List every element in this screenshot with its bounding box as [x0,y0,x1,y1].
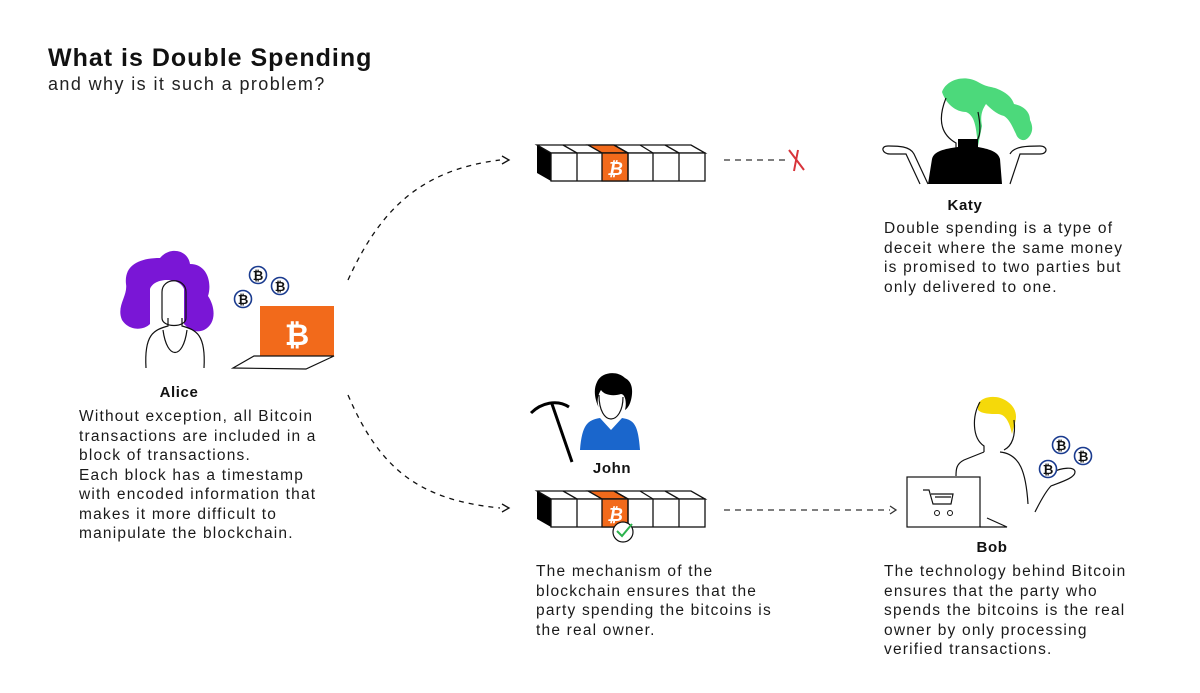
arrow: to Bob [724,506,896,514]
text: blockchain mechanism: blockchain ensures that the [536,583,757,600]
icon: Alice [120,251,214,401]
text: Alice description: transactions are included in a [79,428,317,445]
title: What is Double Spending [48,44,372,72]
text: Katy description: is promised to two parties but [884,259,1122,276]
text: Katy description: Double spending is a type of [884,220,1113,237]
text: Bob description: spends the bitcoins is the real [884,602,1125,619]
icon: laptop with coins [233,266,334,369]
text: Alice description [78,408,317,542]
text: Bob description: owner by only processing [884,622,1088,639]
icon: Bob with laptop [907,397,1092,556]
text: Katy description: deceit where the same money [884,240,1123,257]
text: Alice description: with encoded information that [78,486,316,503]
text: blockchain mechanism: party spending the bitcoins is [536,602,772,619]
icon: John with pickaxe: John [593,460,631,477]
text: Alice description: manipulate the blockchain. [79,525,294,542]
icon: laptop with coins: ₿ [285,319,309,352]
icon: John with pickaxe [531,373,640,477]
icon: Katy: Katy [948,197,983,214]
arrow: to bottom chain [348,395,509,512]
text: blockchain mechanism: the real owner. [536,622,656,639]
text: Alice description: Without exception, all Bitcoin [79,408,313,425]
text: blockchain mechanism: The mechanism of the [536,563,713,580]
text: Bob description: The technology behind Bitcoin [884,563,1126,580]
arrow: to top chain [348,156,509,280]
title [48,44,372,94]
title: and why is it such a problem? [48,74,326,94]
text: Bob description: verified transactions. [884,641,1053,658]
text: Bob description [884,563,1126,658]
text: blockchain mechanism [536,563,772,639]
text: Katy description [884,220,1123,296]
icon: Katy [883,78,1046,214]
arrow: rejected [724,150,804,171]
text: Bob description: ensures that the party who [884,583,1098,600]
blockchain: bottom with check [537,491,705,542]
text: Alice description: makes it more difficult to [79,506,277,523]
text: Alice description: block of transactions. [79,447,251,464]
text: Alice description: Each block has a timestamp [79,467,304,484]
blockchain: top [537,145,705,181]
icon: Bob with laptop: Bob [977,539,1007,556]
text: Katy description: only delivered to one. [884,279,1058,296]
icon: Alice: Alice [160,384,198,401]
